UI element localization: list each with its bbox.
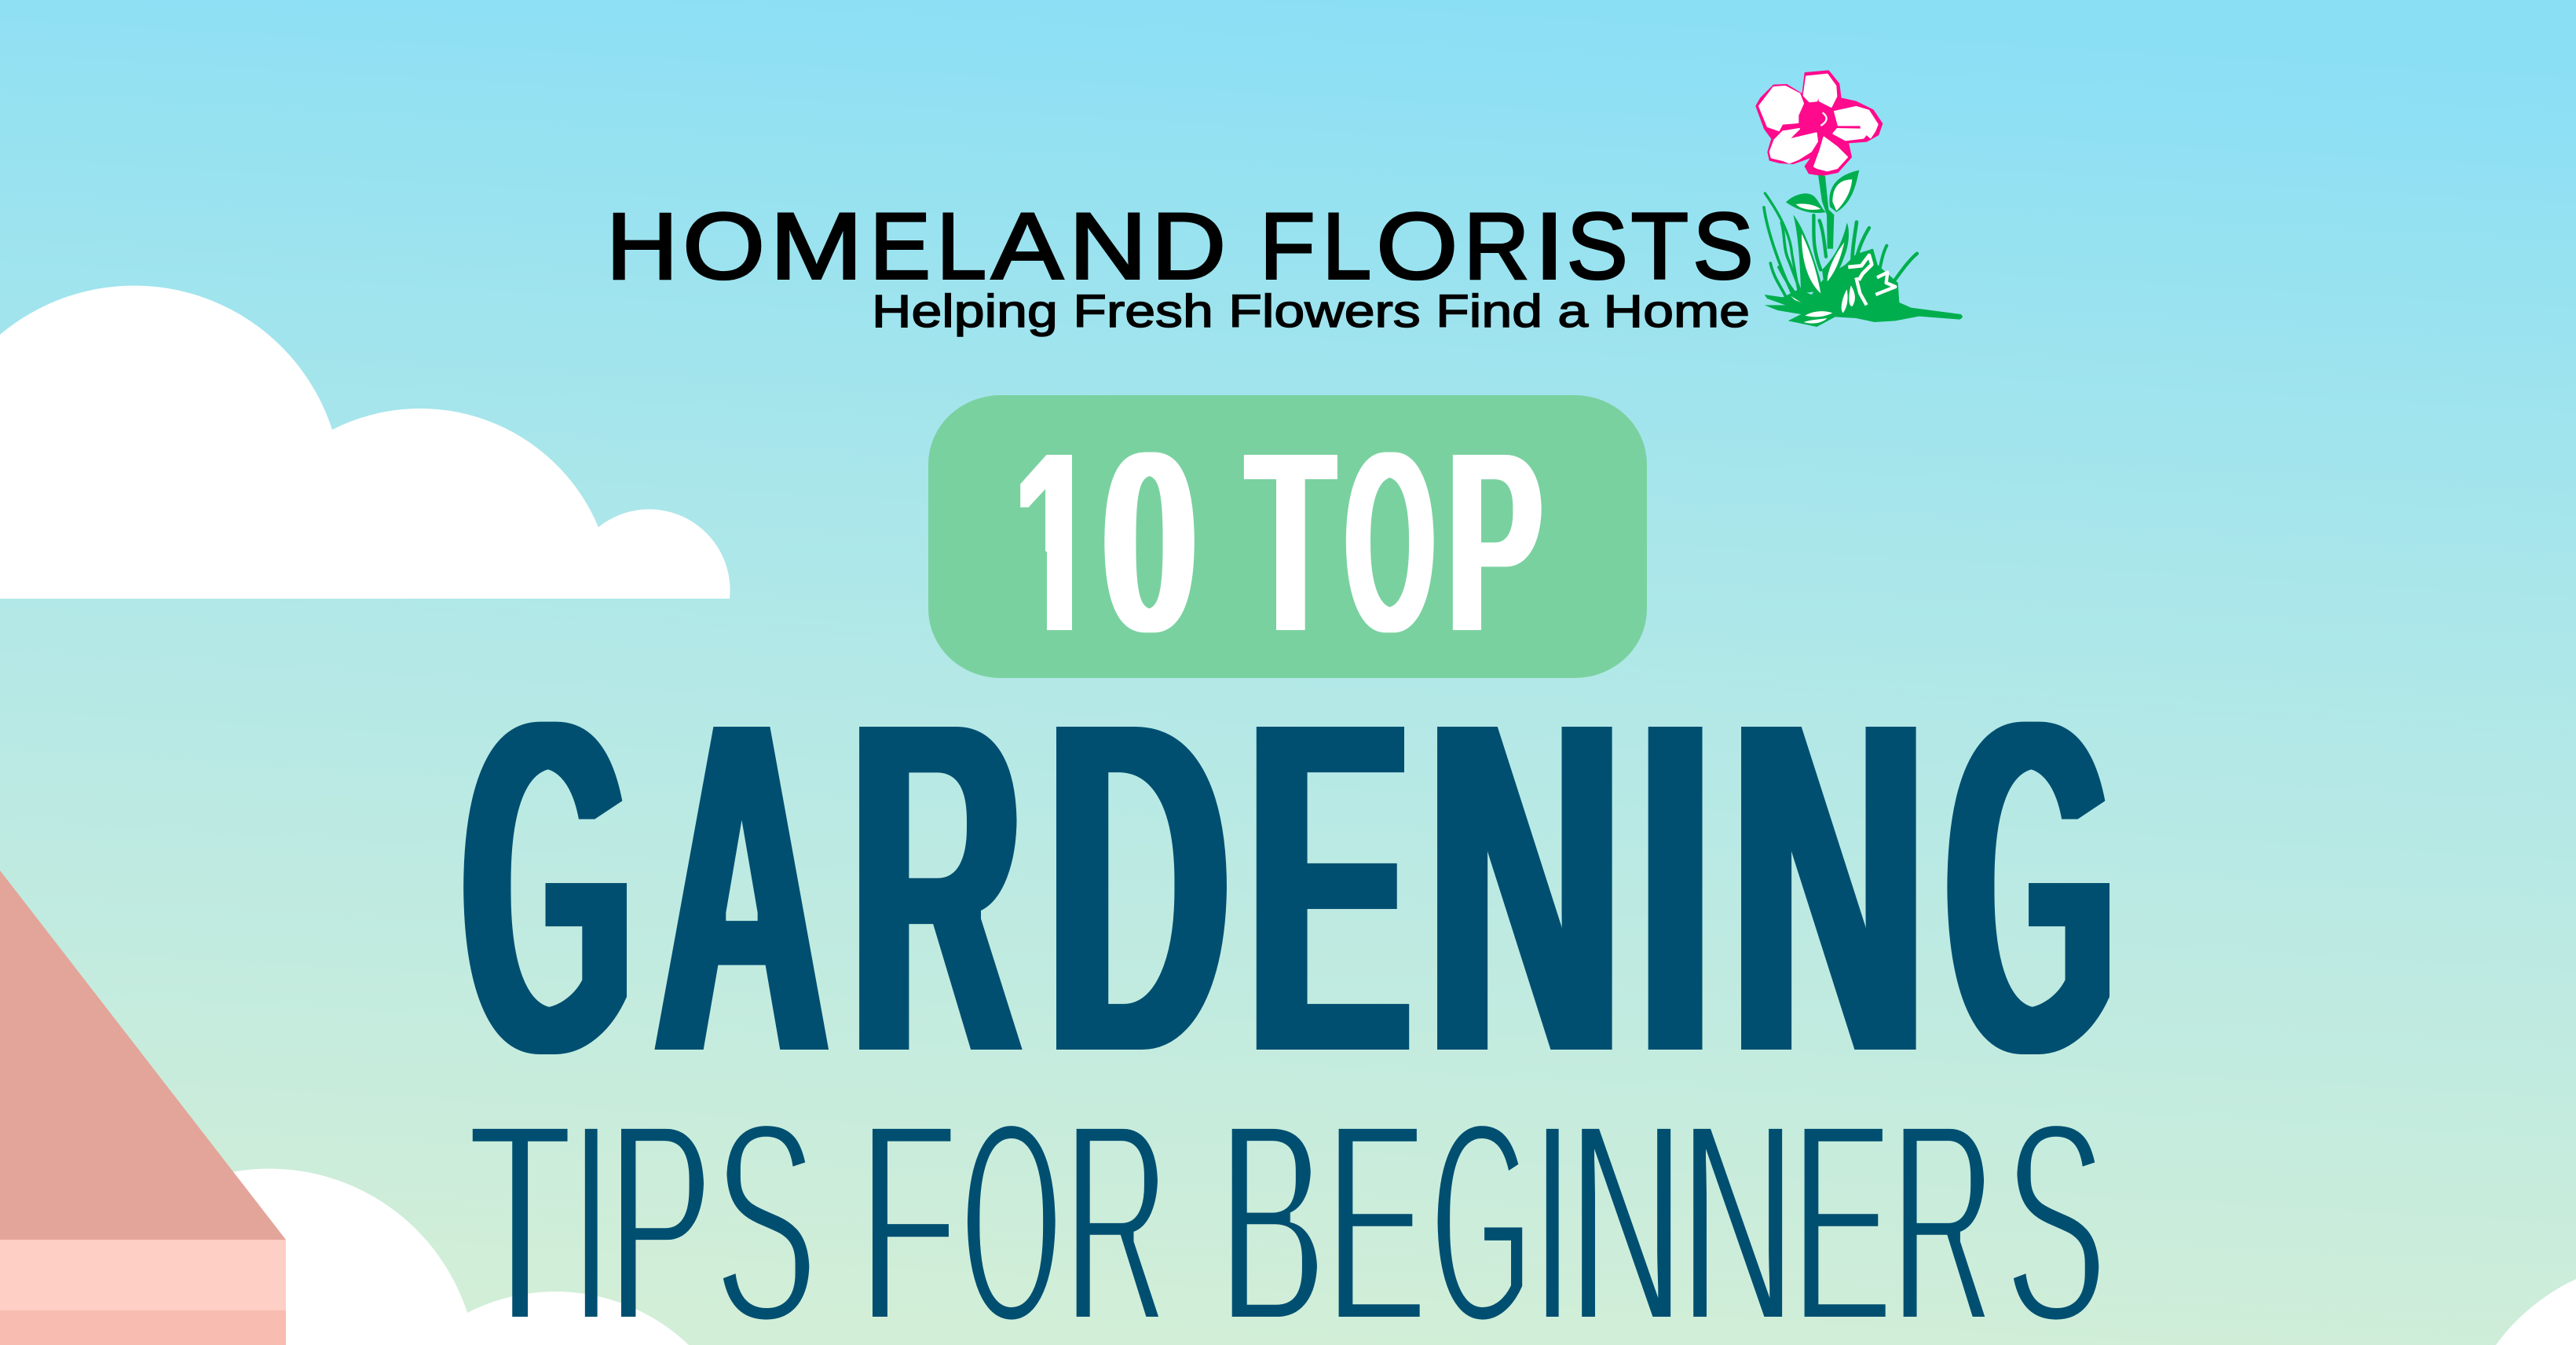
house illustration [0,870,286,1345]
main heading: Gardening: E [1248,618,1411,1156]
logo name: R [1464,194,1530,299]
cloud: bottom left [135,1169,689,1345]
white highlights on foliage [1791,179,1895,324]
logo name: A [991,194,1063,299]
logo name: S [1567,194,1628,299]
main heading: Gardening [463,618,2115,1156]
main heading: Gardening: G [463,618,632,1156]
badge heading: T [1246,397,1335,689]
main heading: Gardening: D [1048,619,1230,1156]
badge heading: P [1447,395,1542,688]
logo name [606,193,1754,299]
logo name: M [770,193,863,299]
logo name: N [1069,194,1147,299]
house roof [0,870,286,1240]
logo name: I [1535,194,1564,299]
main heading: Gardening: R [851,620,1022,1156]
logo name: D [1151,193,1226,299]
logo name: E [869,194,931,299]
badge heading [1020,453,1542,633]
cloud: top left [0,286,730,599]
house lower wall band [0,1310,286,1345]
flower head [1756,71,1883,175]
logo tagline: Helping Fresh Flowers Find a Home [872,286,1750,337]
flower stem, leaves and grass [1764,170,1963,327]
logo name: L [1323,193,1371,299]
badge heading: 1 [1014,396,1098,688]
subheading: Tips for Beginners [469,1061,2106,1345]
icon: flower logo [1756,71,1963,327]
logo name: O [1376,193,1458,299]
main heading: Gardening: G [1946,618,2115,1156]
logo name: F [1260,193,1315,299]
logo name: T [1631,193,1689,299]
cloud: bottom right [2496,1279,2576,1345]
logo: Homeland Florists [606,71,1963,337]
badge background [928,395,1647,678]
logo name: H [606,194,678,299]
main heading: Gardening: N [1427,619,1623,1156]
logo name: O [682,193,765,299]
badge pill: 10 Top [928,395,1647,689]
logo name: S [1692,193,1754,299]
logo name: L [936,193,986,299]
house upper wall band [0,1240,286,1310]
badge heading: O [1345,395,1435,688]
main heading: Gardening: I [1638,618,1712,1156]
badge heading: 0 [1102,396,1198,688]
main heading: Gardening: A [655,618,829,1156]
main heading: Gardening: N [1731,619,1927,1156]
